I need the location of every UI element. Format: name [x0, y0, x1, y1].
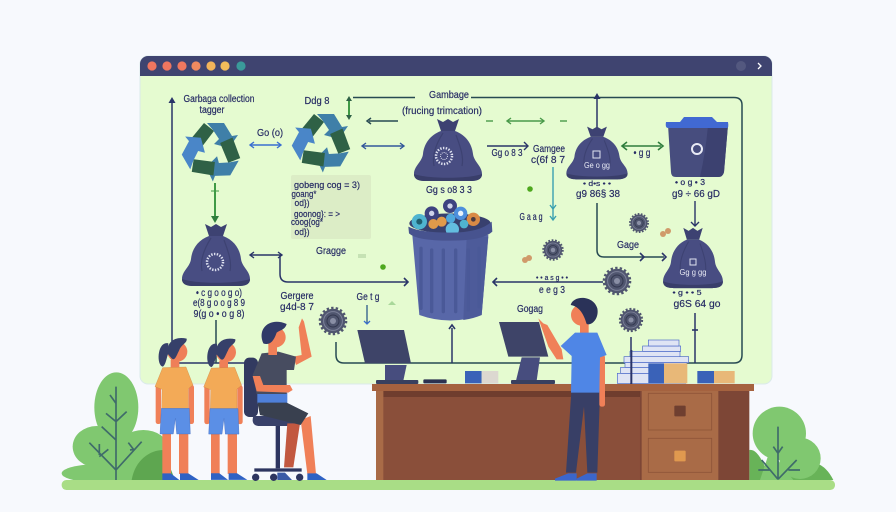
- label block left: [193, 288, 245, 320]
- ground: [62, 480, 835, 490]
- code text: gobeng cog = 3): [294, 180, 360, 190]
- icon: gears: [320, 214, 648, 334]
- plant left: [62, 372, 175, 483]
- can rim: [408, 222, 492, 241]
- code line: coog{og*: [291, 217, 323, 227]
- label: gogag: Gogag: [517, 304, 543, 315]
- desk: [372, 384, 754, 480]
- bag label: Gg g gg: [680, 267, 707, 277]
- label: Gg s o8 3 3: [426, 185, 472, 196]
- colored gears: [412, 199, 480, 236]
- label: c(6f 8 7: [531, 155, 565, 166]
- desk top: [372, 384, 754, 391]
- arrow: left: [367, 118, 398, 124]
- drawers: [642, 391, 718, 480]
- label: • o g • 3: [675, 178, 706, 187]
- decorative dots and pieces: [358, 186, 671, 305]
- label: • • a s g • •: [536, 273, 568, 282]
- can ribs: [419, 247, 481, 313]
- arrow: right: [487, 142, 528, 150]
- small book stack right: [697, 371, 735, 383]
- label: gergere: Gergere: [280, 291, 314, 302]
- girl middle: [204, 339, 247, 480]
- label: Gg o 8 3: [492, 148, 523, 159]
- arrow: teal down: [550, 167, 556, 220]
- code line: od}): [294, 198, 310, 208]
- label: tracing: (frucing trimcation): [402, 106, 482, 117]
- label: g9 ÷ 66 gD: [672, 189, 720, 200]
- bag label: Ge o gg: [584, 160, 610, 170]
- arrow: green down: [211, 183, 219, 223]
- window menu button: [736, 61, 761, 71]
- label: g4d-8 7: [280, 302, 314, 313]
- icon: garbage bag left: [182, 224, 250, 286]
- arrow: blue down: [364, 305, 370, 324]
- label: • g g: [634, 148, 650, 159]
- connector lines: [168, 93, 742, 384]
- icon: garbage bag right: [566, 127, 628, 179]
- scene: ground and plants left, people: [62, 318, 835, 490]
- arrowheads: [404, 253, 698, 330]
- icon: garbage bag centre: [414, 119, 482, 181]
- code line: goonog}: = >: [294, 209, 340, 219]
- window title bar: [140, 56, 772, 76]
- panel: browser window diagram: [140, 56, 772, 384]
- arrow: green vertical double: [346, 96, 352, 120]
- label: gragge: Gragge: [316, 246, 346, 257]
- label: • g • • 5: [672, 288, 702, 297]
- code box: [291, 175, 371, 239]
- label: go tg: Ge t g: [356, 292, 380, 303]
- arrow: green dashes: [486, 118, 567, 124]
- standing man: [538, 298, 607, 481]
- arrow: double left: [250, 252, 282, 258]
- arrow: navy double: [362, 143, 404, 149]
- icon: garbage bag lower right: [663, 228, 723, 288]
- right monitor: [499, 322, 555, 384]
- label: Gage: [617, 240, 640, 251]
- arrow: navy down: [691, 201, 699, 226]
- label: g9 86§ 38: [576, 189, 621, 200]
- label: go: Go (o): [257, 128, 283, 139]
- icon: recycle left: [175, 123, 247, 188]
- line: 9(g o • o g 8): [194, 309, 244, 320]
- label: ddg: Ddg 8: [304, 96, 330, 107]
- small book stack left: [465, 371, 498, 383]
- label: g6S 64 go: [674, 299, 721, 310]
- label: garbage heading: Gambage: [429, 89, 469, 101]
- line: e(8 g o o g 8 9: [193, 298, 245, 309]
- icon: blue bin: [666, 117, 728, 177]
- scene: desk, man, books, plant right: [372, 298, 833, 481]
- label block left: • c g o o g o): [196, 288, 242, 299]
- label: G a a g: [520, 212, 542, 223]
- book stack main: [617, 340, 689, 384]
- main trash can full of gears: [408, 199, 492, 320]
- icon: recycle middle: [285, 114, 357, 179]
- label: trigger: tagger: [200, 105, 225, 116]
- left monitor: [357, 330, 447, 384]
- arrow: green double: [622, 142, 663, 150]
- label: garbage collection trigger: Garbaga collection: [184, 94, 254, 105]
- label: e e g 3: [539, 285, 565, 296]
- seated person: [253, 318, 327, 480]
- arrow: blue double: [250, 142, 281, 148]
- code line: goang*: [292, 189, 317, 199]
- label: • d•s • •: [583, 179, 611, 188]
- girl left: [155, 338, 199, 480]
- code line: od}): [294, 227, 310, 237]
- plant right: [749, 407, 833, 480]
- desk chair: [244, 358, 303, 481]
- window control dots: [147, 61, 246, 71]
- label: gamgee: Gamgee: [533, 144, 565, 155]
- can body: [412, 235, 488, 320]
